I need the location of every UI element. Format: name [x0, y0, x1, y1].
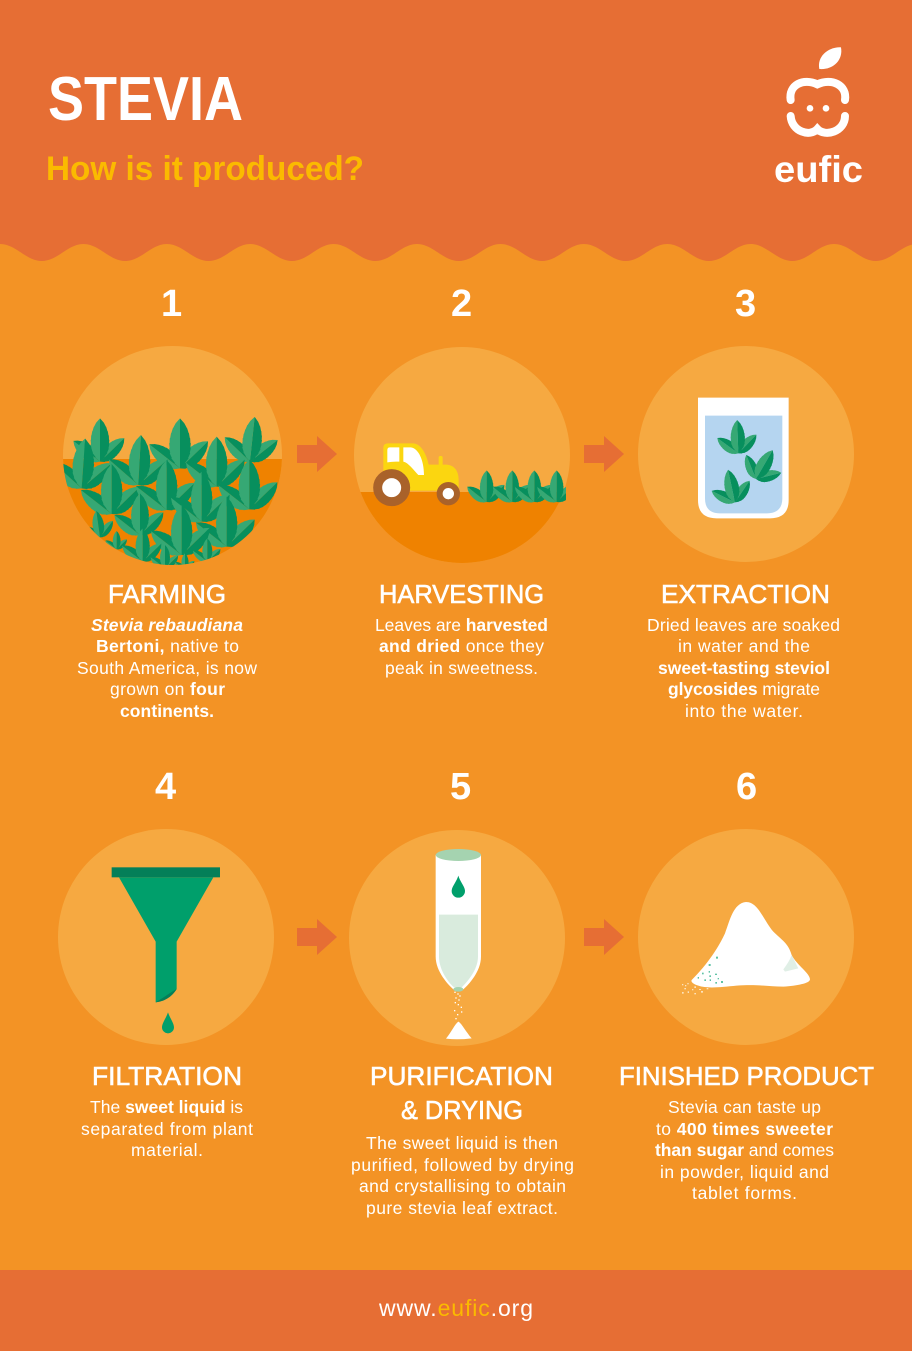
text: harvesting [375, 615, 548, 678]
text: finished product: to 400 times sweeter [656, 1119, 833, 1139]
title: STEVIA [48, 65, 243, 134]
text: filtration: The sweet liquid is [90, 1097, 243, 1117]
subtitle: How is it produced? [46, 150, 364, 188]
panel: finished product [619, 766, 874, 1203]
arrow: purification to finished product [584, 919, 624, 955]
text: harvesting: Leaves are harvested [375, 615, 548, 635]
step number 5: 5 [450, 766, 471, 808]
heading: harvesting: HARVESTING [379, 579, 544, 609]
text: finished product: than sugar and comes [655, 1140, 834, 1160]
footer url: www.eufic.org [378, 1295, 533, 1321]
text: extraction: into the water. [685, 701, 803, 721]
step number 1: 1 [161, 283, 182, 325]
icon: tube with drying powder [349, 830, 565, 1046]
icon: stevia field [63, 346, 282, 565]
text: filtration: separated from plant [81, 1119, 253, 1139]
logo: eufic [774, 47, 863, 190]
text: purification and drying [351, 1133, 574, 1218]
arrow: harvesting to extraction [584, 436, 624, 472]
heading: purification and drying: & DRYING [401, 1095, 523, 1125]
icon: tractor in field [350, 347, 578, 572]
text: farming: continents. [120, 701, 214, 721]
step number 3: 3 [735, 283, 756, 325]
panel: farming [63, 290, 282, 717]
step number 2: 2 [451, 283, 472, 325]
logo: eufic: eufic [774, 149, 863, 190]
text: finished product [655, 1097, 834, 1203]
text: finished product: tablet forms. [692, 1183, 797, 1203]
step number 6: 6 [736, 766, 757, 808]
icon: glass of water with leaves [638, 346, 854, 562]
heading: extraction: EXTRACTION [661, 579, 830, 609]
arrow: farming to harvesting [297, 436, 337, 472]
icon: pile of powder [638, 829, 854, 1045]
text: finished product: Stevia can taste up [668, 1097, 821, 1117]
text: extraction: Dried leaves are soaked [647, 615, 840, 635]
text: extraction: glycosides migrate [668, 679, 820, 699]
heading: filtration: FILTRATION [92, 1061, 242, 1091]
panel: purification and drying [349, 766, 574, 1218]
footer band [0, 1270, 912, 1351]
text: extraction: sweet-tasting steviol [658, 658, 830, 678]
text: harvesting: and dried once they [379, 636, 544, 656]
text: farming: grown on four [110, 679, 225, 699]
icon: funnel [58, 829, 274, 1045]
panel: harvesting [350, 283, 578, 678]
text: farming [77, 615, 257, 721]
text: purification and drying: pure stevia leaf extract. [366, 1198, 558, 1218]
heading: purification and drying [370, 1061, 553, 1125]
text: filtration: material. [131, 1140, 203, 1160]
heading: finished product: FINISHED PRODUCT [619, 1061, 874, 1091]
step number 4: 4 [155, 766, 176, 808]
text: extraction [647, 615, 840, 721]
heading: farming: FARMING [108, 579, 226, 609]
text: extraction: in water and the [678, 636, 810, 656]
text: farming: Stevia rebaudiana [91, 615, 243, 635]
arrow: filtration to purification [297, 919, 337, 955]
header band with wavy edge [0, 0, 912, 280]
text: harvesting: peak in sweetness. [385, 658, 538, 678]
text: finished product: in powder, liquid and [660, 1162, 829, 1182]
heading: purification and drying: PURIFICATION [370, 1061, 553, 1091]
text: filtration [81, 1097, 253, 1160]
panel: filtration [58, 766, 274, 1160]
text: farming: Bertoni, native to [96, 636, 239, 656]
text: purification and drying: The sweet liquid is then [366, 1133, 558, 1153]
panel: extraction [638, 283, 854, 721]
text: purification and drying: and crystallising to obtain [359, 1176, 566, 1196]
text: farming: South America, is now [77, 658, 257, 678]
text: purification and drying: purified, followed by drying [351, 1155, 574, 1175]
